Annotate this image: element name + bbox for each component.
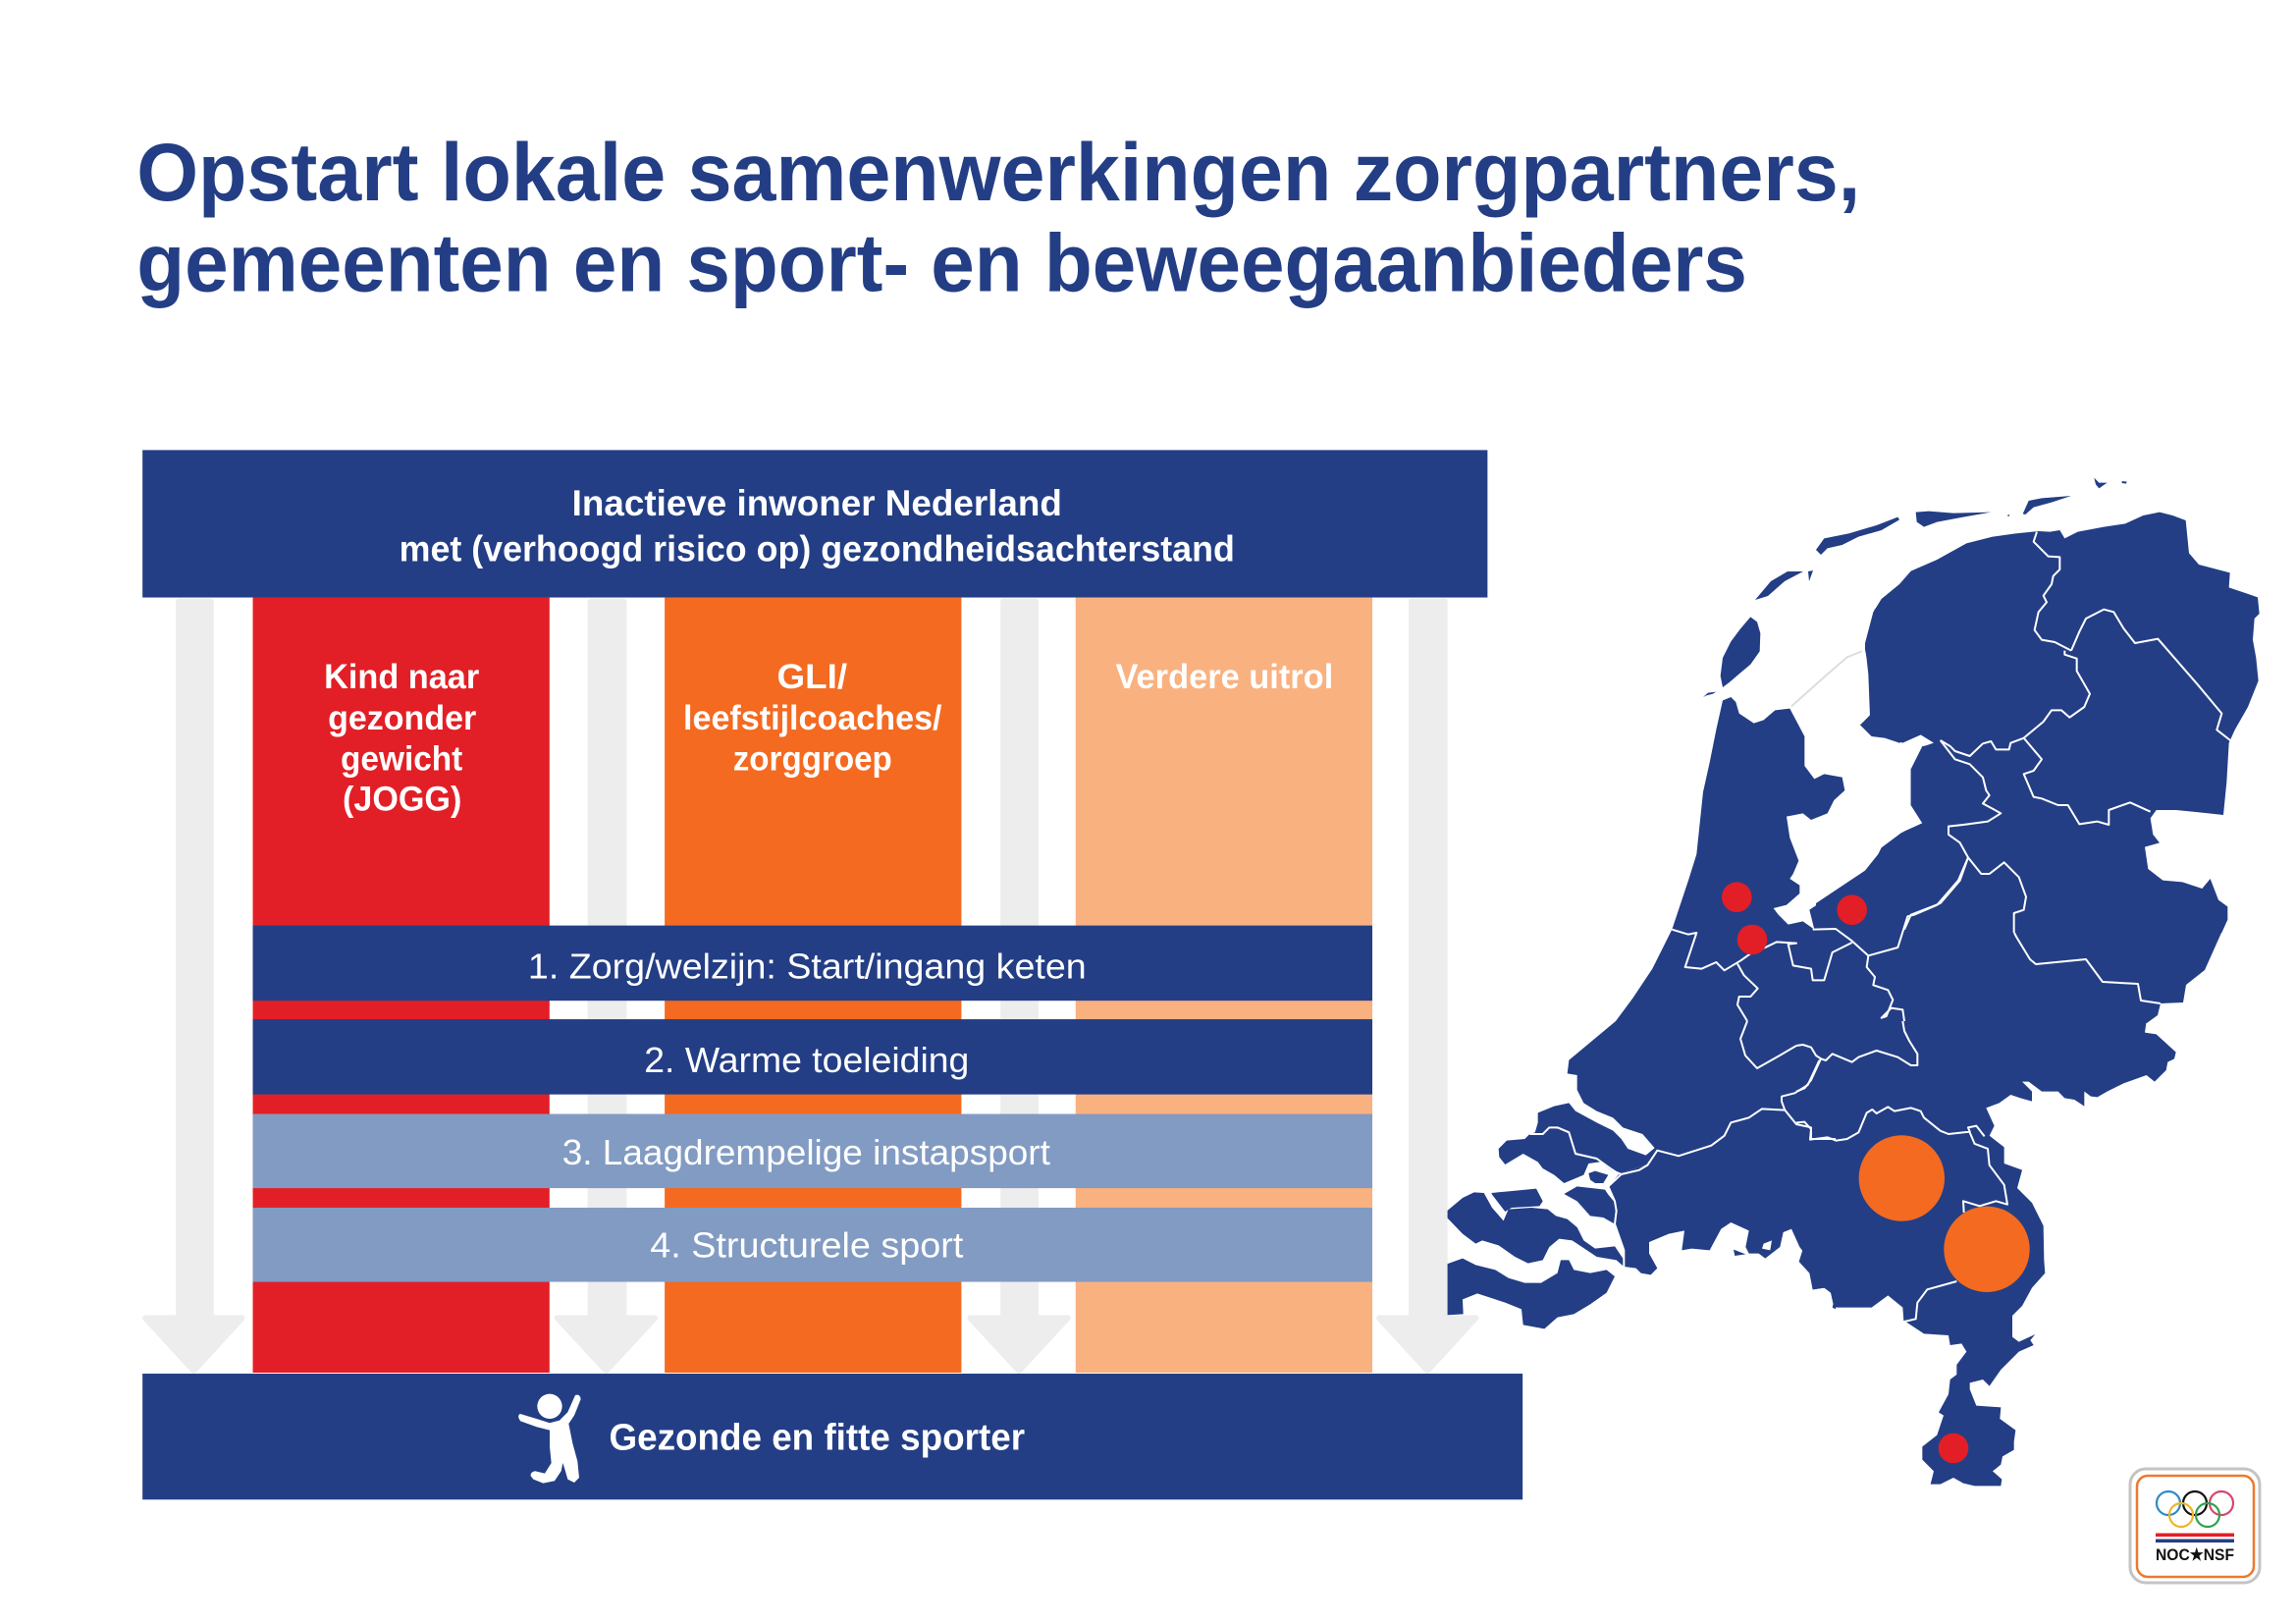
arrow 2 [558,602,655,1371]
map: linking borders [1740,933,2161,1068]
column: Verdere uitrol [1076,598,1372,1373]
column: GLI [665,598,961,1373]
bar 1: 1. Zorg/welzijn: Start/ingang keten [528,947,1087,986]
panel: footer [142,1374,1522,1499]
bar 4: 4. Structurele sport [650,1226,963,1266]
arrow 3 [970,602,1068,1371]
logo: NOC*NSF [2130,1469,2260,1583]
column: GLI: GLI/ [776,658,847,696]
bar 2: 2. Warme toeleiding [644,1041,969,1080]
column: Kind naar gezonder gewicht [253,598,550,1373]
title: Opstart lokale samenwerkingen zorgpartners, [136,126,1860,218]
column: GLI: zorggroep [733,740,892,779]
bar 3: 3. Laagdrempelige instapsport [562,1133,1050,1172]
column: Kind naar gezonder gewicht: gezonder [328,699,477,737]
map: southeast land [1796,1021,2176,1486]
map: connecting land areas [1569,570,2227,1070]
panel: header: Inactieve inwoner Nederland [572,483,1062,523]
map marker: red dot [1837,894,1867,925]
panel: footer: Gezonde en fitte sporter [609,1418,1025,1459]
arrows [145,602,1475,1371]
column: GLI: leefstijlcoaches/ [683,699,942,737]
bar 2 [253,1019,1372,1095]
map: southwest province borders [1529,1060,1836,1267]
bar 4 [253,1208,1372,1282]
map marker: red dot [1939,1434,1968,1463]
map marker: orange dot [1944,1207,2030,1292]
panel: header: met (verhoogd risico op) gezondheidsachterstand [400,529,1235,569]
column: Kind naar gezonder gewicht: Kind naar [324,658,480,696]
map marker: orange dot [1859,1135,1945,1221]
arrow 1 [145,602,242,1371]
map of the Netherlands [1447,478,2260,1486]
map: north province borders [1904,532,2231,933]
map: north land [1816,478,2260,933]
column: Kind naar gezonder gewicht: (JOGG) [343,780,461,818]
arrow 4 [1379,602,1475,1371]
icon: jumping sporter [518,1394,581,1484]
panel: header [142,450,1487,598]
map: central province borders [1672,857,1968,1021]
map: southwest land [1447,1060,1836,1328]
title [136,126,1860,308]
bar 1 [253,926,1372,1001]
logo: NOC*NSF: NOC★NSF [2156,1545,2234,1564]
column: Verdere uitrol: Verdere uitrol [1116,658,1333,696]
map: North Holland and Flevoland land [1616,609,2002,1021]
map: southeast province borders [1796,1021,2007,1322]
bar 3 [253,1114,1372,1188]
title: gemeenten en sport- en beweegaanbieders [136,216,1747,308]
column: Kind naar gezonder gewicht: gewicht [341,740,463,779]
map marker: red dot [1737,925,1767,954]
map marker: red dot [1722,882,1752,912]
